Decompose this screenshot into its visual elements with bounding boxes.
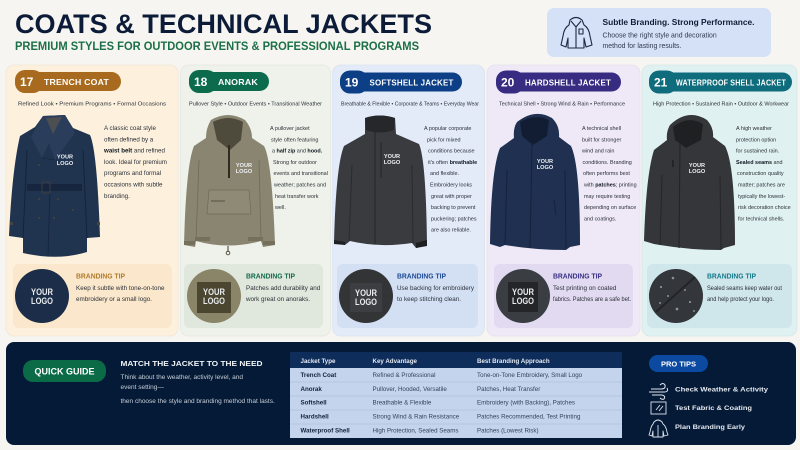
jacket image: waterproof shell: YOUR — [689, 163, 705, 169]
jacket image: waterproof shell: LOGO — [689, 169, 706, 175]
description: style often featuring — [271, 137, 318, 143]
description: Embroidery looks — [430, 182, 472, 188]
description: conditions. Branding — [582, 160, 632, 166]
comparison table: Patches (Lowest Risk) — [477, 428, 539, 434]
features line: Breathable & Flexible • Corporate & Teams • Everyday Wear — [341, 102, 479, 108]
branding tip: BRANDING TIP — [246, 274, 295, 280]
badge: 17 trench coat: 17 — [20, 75, 34, 89]
features line: Refined Look • Premium Programs • Formal Occasions — [18, 102, 166, 108]
description: great with proper — [431, 194, 472, 200]
description: and flexible. — [430, 171, 460, 177]
callout: subtle branding: Choose the right style and decoration — [602, 32, 717, 40]
quick guide text: Think about the weather, activity level, and — [120, 374, 243, 381]
comparison table: Embroidery (with Backing), Patches — [477, 400, 575, 406]
tip: check weather: Check Weather & Activity — [675, 386, 768, 394]
jacket image: trench coat — [9, 115, 100, 257]
jacket image: anorak: YOUR — [236, 163, 252, 169]
badge: 18 anorak: ANORAK — [218, 77, 258, 87]
comparison table: Strong Wind & Rain Resistance — [372, 414, 460, 420]
description: backing to prevent — [431, 205, 476, 211]
description: construction quality — [737, 171, 784, 177]
branding tip: YOUR — [203, 287, 225, 297]
description: weather; patches and — [273, 182, 326, 188]
jacket image: trench coat: LOGO — [57, 161, 74, 167]
icon: water droplets on fabric — [649, 269, 703, 323]
features line: Pullover Style • Outdoor Events • Transitional Weather — [189, 102, 322, 108]
title: COATS & TECHNICAL JACKETS — [15, 9, 432, 39]
panel: softshell jacket — [332, 65, 484, 336]
description: matter; patches are — [738, 182, 785, 188]
quick guide text: MATCH THE JACKET TO THE NEED — [120, 359, 263, 368]
description — [270, 126, 328, 211]
branding tip — [13, 264, 172, 328]
description: heat transfer work — [275, 194, 319, 200]
callout: subtle branding — [547, 8, 771, 57]
description: may require testing — [584, 194, 630, 200]
branding tip: Use backing for embroidery — [397, 285, 475, 292]
comparison table: Best Branding Approach — [477, 358, 550, 365]
features line: Technical Shell • Strong Wind & Rain • Performance — [499, 102, 625, 108]
panel: anorak — [180, 65, 330, 336]
badge: 21 waterproof: 21 — [654, 76, 668, 90]
description: for technical shells. — [738, 216, 785, 222]
description: protection option — [736, 137, 776, 143]
branding tip: work great on anoraks. — [245, 296, 310, 303]
description: often defined by a — [104, 136, 154, 143]
callout: subtle branding: Subtle Branding. Strong Performance. — [602, 18, 754, 27]
description: waist belt and refined — [103, 148, 165, 155]
badge: 19 softshell — [340, 70, 462, 94]
icon: jacket — [649, 420, 668, 437]
callout: subtle branding: method for lasting results. — [602, 43, 681, 50]
pro tips pill: PRO TIPS — [661, 360, 696, 368]
description: wind and rain — [581, 149, 614, 155]
badge: 20 hardshell: HARDSHELL JACKET — [525, 78, 612, 88]
panel: waterproof shell jacket — [642, 65, 797, 336]
branding tip: BRANDING TIP — [707, 274, 756, 280]
features line: High Protection • Sustained Rain • Outdoor & Workwear — [653, 102, 789, 108]
description: conditions because — [428, 149, 475, 155]
branding tip — [647, 264, 792, 328]
branding tip: YOUR — [31, 287, 53, 297]
description: typically the lowest- — [738, 194, 785, 200]
description: Sealed seams and — [736, 160, 783, 166]
description: often performs best — [583, 171, 630, 177]
quick guide text: then choose the style and branding method that lasts. — [120, 398, 275, 405]
description: Strong for outdoor — [273, 160, 317, 166]
branding tip: BRANDING TIP — [76, 274, 125, 280]
jacket image: anorak — [184, 115, 275, 255]
comparison table: Hardshell — [300, 414, 329, 420]
jacket image: waterproof shell — [644, 115, 735, 250]
quick guide pill: QUICK GUIDE — [34, 366, 95, 376]
branding tip: Keep it subtle with tone-on-tone — [76, 285, 165, 292]
description: it's often breathable — [428, 160, 477, 166]
comparison table: Trench Coat — [300, 372, 336, 379]
description: occasions with subtle — [104, 182, 163, 188]
comparison table: Jacket Type — [300, 358, 336, 365]
description: A high weather — [736, 126, 772, 132]
branding tip: BRANDING TIP — [397, 274, 446, 280]
comparison table: Key Advantage — [372, 358, 418, 365]
panel: hardshell jacket — [487, 65, 640, 336]
comparison table: Refined & Professional — [372, 372, 435, 379]
description — [424, 126, 477, 234]
icon: jacket outline — [561, 18, 592, 48]
badge: 17 trench coat: TRENCH COAT — [44, 77, 110, 87]
jacket image: hardshell: LOGO — [537, 165, 554, 171]
comparison table: Waterproof Shell — [300, 428, 350, 434]
quick guide text: event setting— — [120, 384, 164, 391]
comparison table — [290, 352, 622, 438]
branding tip — [337, 264, 478, 328]
jacket image: anorak: LOGO — [236, 169, 253, 175]
jacket image: hardshell: YOUR — [537, 159, 553, 165]
panel: quick guide band — [6, 342, 796, 445]
comparison table: Anorak — [300, 386, 322, 393]
branding tip: YOUR — [355, 288, 377, 298]
comparison table: Softshell — [300, 400, 327, 406]
description — [736, 126, 791, 222]
comparison table: Patches Recommended, Test Printing — [477, 414, 581, 420]
jacket image: softshell — [334, 116, 427, 248]
tip: plan branding: Plan Branding Early — [675, 424, 745, 431]
panel: trench coat — [6, 65, 178, 336]
pro tips — [649, 355, 768, 437]
description: branding. — [104, 193, 130, 200]
branding tip: Sealed seams keep water out — [707, 285, 782, 292]
icon: wind — [649, 384, 668, 399]
badge: 21 waterproof — [649, 70, 792, 94]
description: for sustained rain. — [736, 149, 780, 155]
jacket image: hardshell — [490, 114, 580, 250]
branding tip: fabrics. Patches are a safe bet. — [553, 296, 631, 303]
description: A technical shell — [582, 126, 621, 132]
description — [581, 126, 637, 222]
branding tip: BRANDING TIP — [553, 274, 602, 280]
badge: 18 anorak: 18 — [194, 75, 208, 89]
description: built for stronger — [582, 137, 621, 143]
comparison table: Patches, Heat Transfer — [477, 386, 540, 393]
branding tip: LOGO — [203, 296, 225, 306]
quick guide pill — [23, 360, 106, 382]
branding tip: Test printing on coated — [553, 285, 617, 292]
badge: 18 anorak — [189, 70, 269, 93]
branding tip: LOGO — [31, 296, 53, 306]
branding tip: embroidery or a small logo. — [76, 296, 152, 303]
badge: 19 softshell: 19 — [345, 76, 359, 90]
jacket image: trench coat: YOUR — [57, 154, 73, 160]
icon: fabric test — [651, 402, 666, 414]
jacket image: softshell: YOUR — [384, 154, 400, 160]
badge: 17 trench coat — [15, 70, 121, 93]
description — [103, 125, 167, 200]
badge: 20 hardshell — [496, 70, 621, 94]
comparison table: High Protection, Sealed Seams — [372, 428, 458, 434]
quick guide text — [120, 359, 275, 405]
branding tip — [184, 264, 323, 328]
description: puckering; patches — [431, 216, 477, 222]
branding tip: Patches add durability and — [246, 285, 321, 292]
description: A classic coat style — [104, 125, 156, 132]
badge: 19 softshell: SOFTSHELL JACKET — [370, 78, 454, 88]
description: A pullover jacket — [270, 126, 310, 132]
description: pick for mixed — [427, 137, 461, 143]
description: risk decoration choice — [738, 205, 791, 211]
badge: 20 hardshell: 20 — [501, 76, 515, 90]
branding tip: to keep stitching clean. — [397, 296, 461, 303]
comparison table: Pullover, Hooded, Versatile — [372, 386, 447, 393]
description: look. Ideal for premium — [104, 159, 167, 166]
tip: test fabric: Test Fabric & Coating — [675, 405, 752, 412]
description: a half zip and hood. — [272, 149, 323, 155]
description: with patches; printing — [583, 182, 637, 188]
description: and coatings. — [584, 216, 617, 222]
jacket image: softshell: LOGO — [384, 160, 401, 166]
description: programs and formal — [104, 170, 161, 177]
branding tip: and help protect your logo. — [707, 296, 774, 303]
branding tip: LOGO — [512, 296, 534, 306]
branding tip: YOUR — [512, 287, 534, 297]
branding tip — [494, 264, 633, 328]
comparison table: Breathable & Flexible — [372, 400, 432, 406]
comparison table: Tone-on-Tone Embroidery, Small Logo — [477, 372, 583, 379]
branding tip: LOGO — [355, 297, 377, 307]
description: A popular corporate — [424, 126, 471, 132]
description: are also reliable. — [431, 228, 471, 234]
description: depending on surface — [584, 205, 636, 211]
description: events and transitional — [274, 171, 328, 177]
subtitle: PREMIUM STYLES FOR OUTDOOR EVENTS & PROFESSIONAL PROGRAMS — [15, 41, 419, 53]
description: well. — [274, 205, 286, 211]
